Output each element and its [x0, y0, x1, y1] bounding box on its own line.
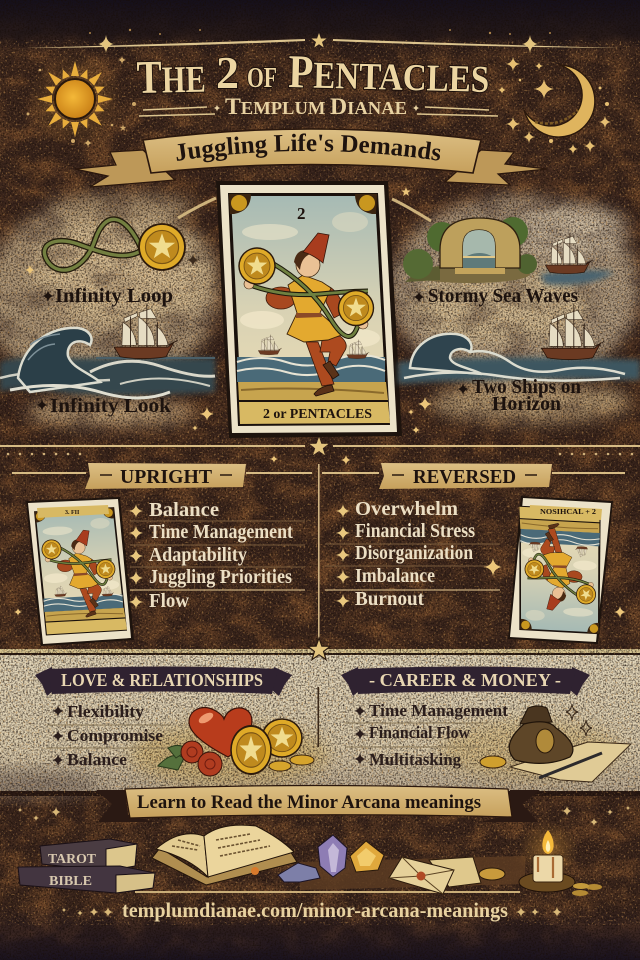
card: reversed: NOSIHCAL + 2 [540, 508, 597, 516]
shelf [135, 856, 525, 893]
label: Infinity Loop: Infinity Loop [55, 285, 173, 307]
banner: Juggling Life's Demands: Juggling Life's Demands [176, 133, 440, 162]
card: upright [26, 497, 134, 646]
background: parchment panel [0, 649, 640, 799]
subtitle: Templum Dianae [139, 94, 498, 119]
top ornamental rule [25, 29, 620, 53]
illustration: wave and ship right [398, 306, 640, 384]
icon: Tarot and Bible books [18, 839, 155, 893]
list: reversed meanings: Imbalance [355, 565, 435, 587]
illustration: stone archway [403, 217, 537, 283]
label: Two Ships on Horizon: Horizon [492, 393, 561, 415]
vertical rule between themes [318, 687, 319, 747]
banner: Juggling Life's Demands [76, 128, 547, 188]
central vertical rule [318, 464, 320, 640]
banner: Career & Money [341, 666, 590, 696]
background: left cloud panel [0, 194, 218, 426]
card number: 2 [297, 204, 306, 223]
list: career keywords: Financial Flow [369, 723, 471, 742]
icon: crescent moon [498, 57, 611, 154]
panel: central tarot card [216, 181, 402, 438]
heading: Upright [12, 463, 312, 489]
list: upright meanings [129, 499, 305, 612]
list: upright meanings: Flow [149, 590, 190, 612]
label: Infinity Look: Infinity Look [50, 395, 172, 417]
title: PENTACLES [288, 46, 490, 103]
icon: Tarot and Bible books: TAROT [48, 852, 97, 867]
list: reversed meanings: Overwhelm [355, 498, 458, 520]
illustration: ship right top [540, 233, 615, 285]
label: Two Ships on Horizon: Two Ships on [472, 376, 581, 398]
icon: open book [152, 825, 297, 885]
list: upright meanings: Adaptability [149, 544, 247, 566]
banner: Career & Money: - CAREER & MONEY - [369, 670, 561, 690]
panel: career and money [341, 666, 631, 782]
sparkles beside lower banner [18, 806, 630, 826]
heading: Reversed [322, 463, 625, 489]
list: career keywords [345, 701, 508, 769]
subtitle: Templum Dianae: TEMPLUM DIANAE [225, 94, 407, 119]
list: reversed meanings [325, 498, 500, 610]
icon: sealed envelope and letter [389, 857, 505, 894]
background: cloud mottling [0, 165, 640, 445]
list: reversed meanings: Disorganization [355, 542, 473, 564]
list: upright meanings: Balance [149, 499, 219, 521]
divider star over parchment [308, 638, 330, 660]
title: THE [136, 51, 206, 104]
panel: upright [12, 463, 312, 646]
icon: sun [26, 52, 136, 148]
panel: love and relationships [35, 666, 314, 776]
icon: crystals [278, 835, 384, 882]
banner: Love & Relationships [35, 666, 292, 696]
title: OF [247, 62, 277, 94]
label: Two Ships on Horizon [457, 376, 581, 415]
icon: Tarot and Bible books: BIBLE [49, 874, 92, 889]
banner: Learn to read: Learn to Read the Minor Arcana meanings [137, 792, 481, 813]
title [136, 46, 490, 104]
label: Stormy Sea Waves: Stormy Sea Waves [428, 285, 578, 307]
list: love keywords: Compromise [67, 726, 163, 745]
list: love keywords [47, 702, 172, 769]
heading: Reversed: REVERSED [413, 466, 516, 488]
list: reversed meanings: Burnout [355, 588, 424, 610]
sparkle stars [14, 455, 626, 618]
list: love keywords: Flexibility [67, 702, 145, 721]
section divider with star [0, 437, 640, 455]
banner: Love & Relationships: LOVE & RELATIONSHIPS [61, 670, 263, 690]
title: 2 [216, 48, 239, 98]
list: reversed meanings: Financial Stress [355, 520, 475, 542]
icon: coin pouch, paper and pen [480, 704, 631, 782]
panel: reversed [14, 455, 626, 644]
list: upright meanings: Time Management [149, 521, 293, 543]
icon: infinity loop with coin [44, 219, 186, 271]
list: career keywords: Time Management [369, 701, 508, 720]
card caption: 2 or PENTACLES [263, 407, 372, 422]
list: upright meanings: Juggling Priorities [149, 566, 292, 588]
connector rays to card [178, 198, 431, 221]
icon: heart, coins and roses [158, 708, 314, 776]
list: career keywords: Multitasking [369, 750, 461, 769]
illustration: wave and ship left [0, 305, 215, 398]
background: right cloud panel [390, 196, 640, 422]
stars around the clouds [25, 187, 432, 434]
banner: Learn to read [96, 786, 540, 822]
heading: Upright: UPRIGHT [120, 466, 213, 488]
list: love keywords: Balance [67, 750, 127, 769]
website url: templumdianae.com/minor-arcana-meanings [122, 898, 508, 922]
icon: candle [518, 820, 602, 896]
card: reversed [508, 496, 613, 644]
card: upright: 3. FII [65, 510, 80, 516]
